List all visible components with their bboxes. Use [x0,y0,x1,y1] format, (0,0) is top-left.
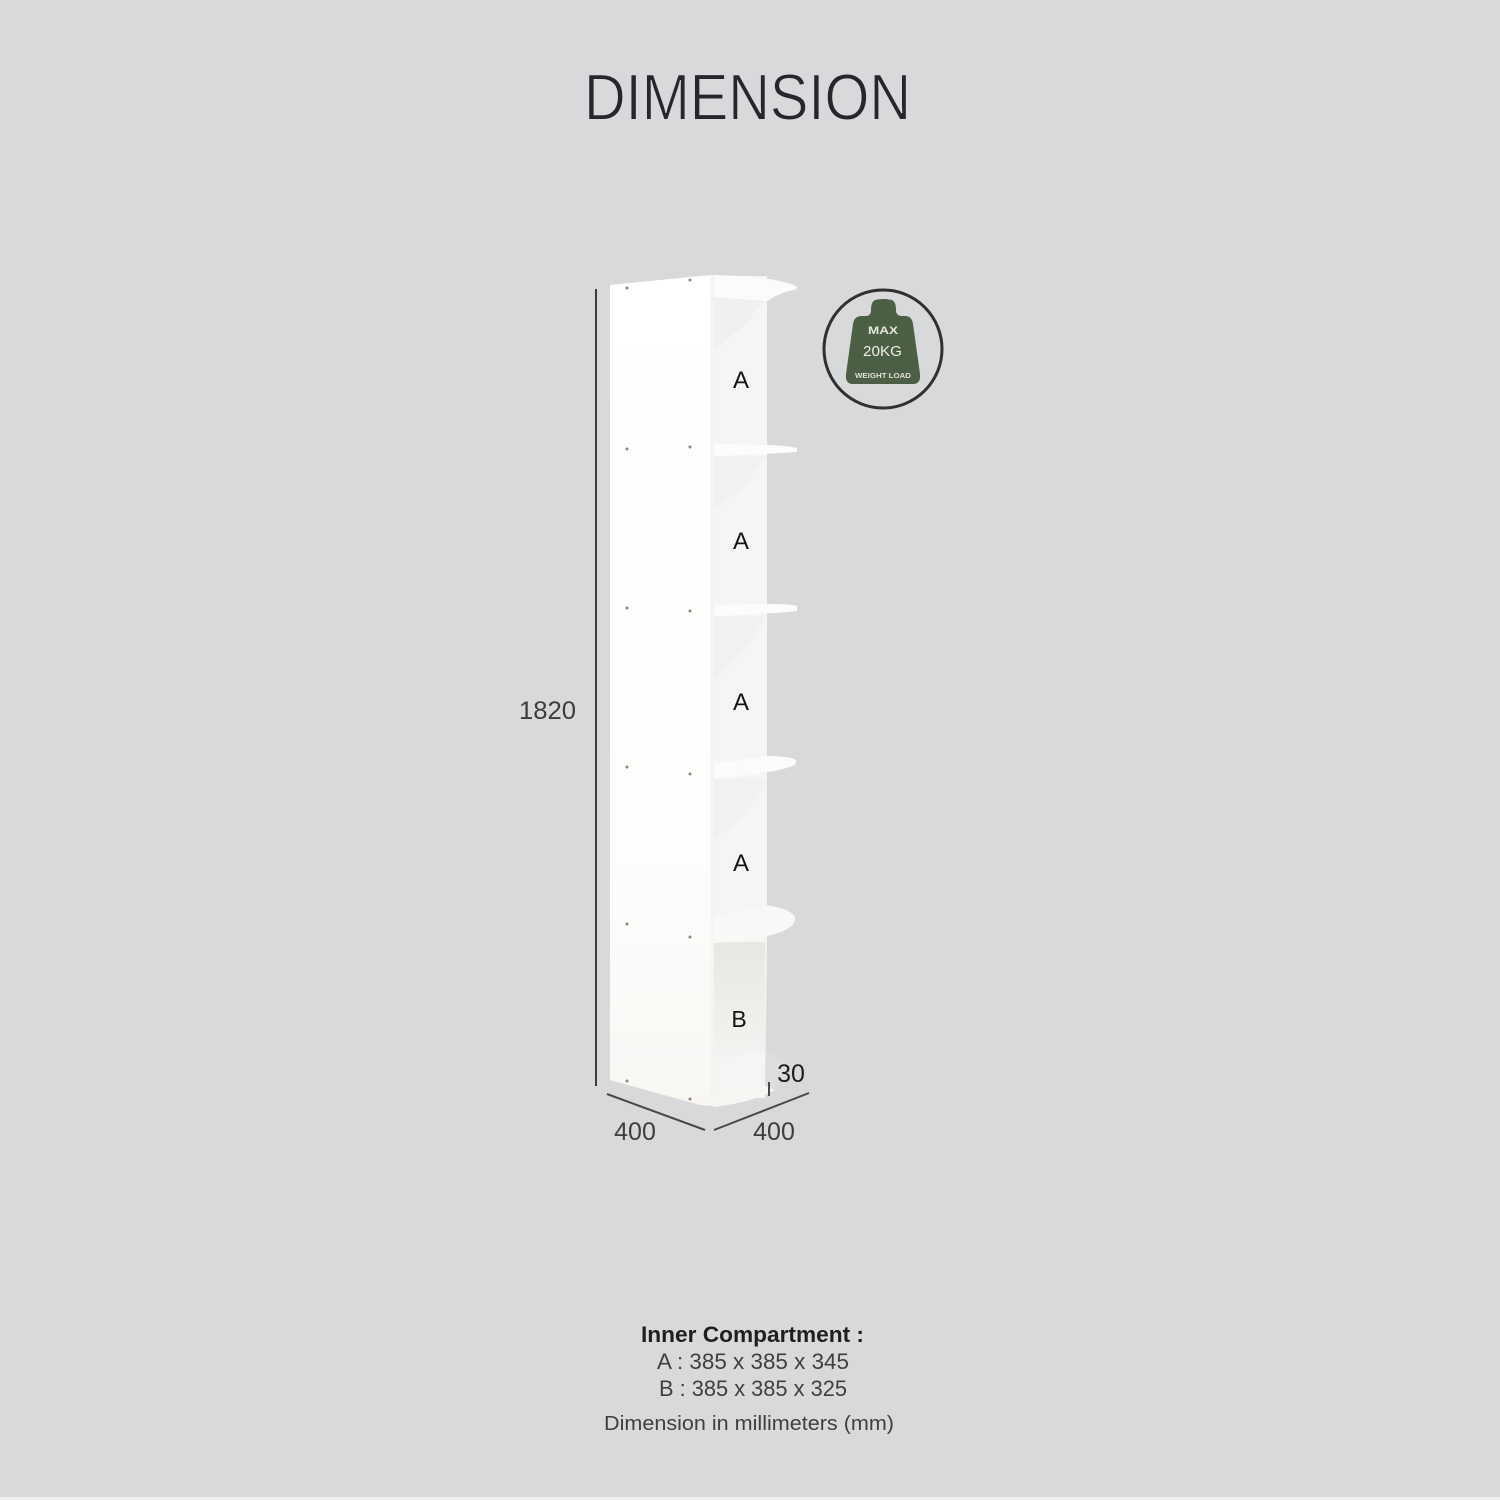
width label right: 400 [753,1118,795,1146]
side panel [610,275,712,1106]
shelf unit illustration [610,275,797,1107]
inner compartment notes [604,1322,894,1435]
height label: 1820 [519,697,576,725]
weight load badge: MAX [868,325,899,337]
thickness tick [768,1082,770,1096]
depth dimension line right [714,1093,809,1130]
compartment labels [731,367,749,1032]
inner compartment notes: B : 385 x 385 x 325 [659,1376,847,1401]
shelf 3 [714,604,797,616]
inner compartment notes: Inner Compartment : [641,1322,864,1347]
icon: weight [846,299,920,384]
inner compartment notes: Dimension in millimeters (mm) [604,1413,894,1435]
screw holes [626,278,692,1100]
compartment labels: A [733,528,749,555]
height dimension line [595,289,597,1086]
width label left: 400 [614,1118,656,1146]
weight load badge: WEIGHT LOAD [855,371,912,380]
shelf 5 [714,905,795,943]
faint bottom shelf extension [766,1050,788,1090]
weight load badge: 20KG [863,343,902,360]
depth dimension line left [607,1094,705,1130]
thickness label: 30 [777,1060,805,1088]
compartment labels: A [733,850,749,877]
compartment labels: B [731,1006,747,1032]
inner back panel [713,276,767,1098]
inner compartment notes: A : 385 x 385 x 345 [657,1349,849,1374]
lower compartment shading [714,942,765,1060]
compartment labels: A [733,689,749,716]
shelf 1 [714,275,797,301]
bottom shelf [713,1086,775,1107]
shelf 4 [714,756,796,779]
compartment labels: A [733,367,749,394]
title: DIMENSION [584,60,911,134]
shadow wedges [714,298,766,350]
shelf 2 [714,444,797,456]
weight load badge [824,290,942,408]
